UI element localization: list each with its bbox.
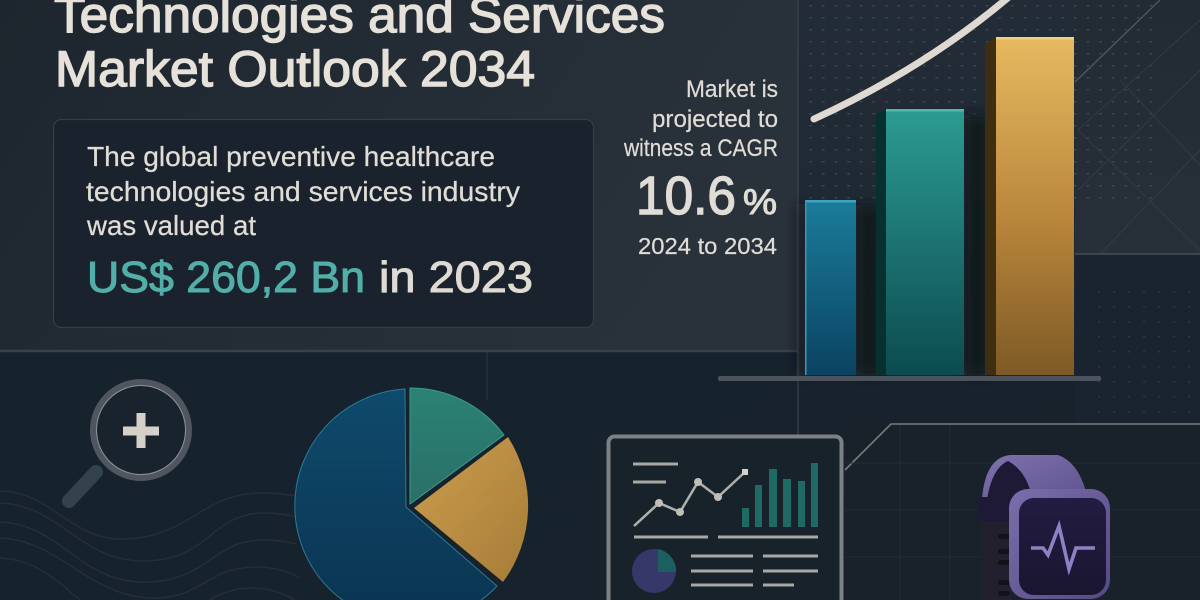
CAGR callout: 2024 to 2034: [638, 233, 777, 259]
watch strap: [982, 455, 1086, 500]
CAGR callout: Market is: [686, 76, 778, 103]
CAGR callout: 10.6: [636, 166, 736, 226]
growth arrow curve: [814, 0, 1010, 119]
dashboard text lines: [633, 464, 818, 585]
market value description: technologies and services industry: [86, 176, 520, 207]
title: [54, 0, 665, 97]
market value description: The global preventive healthcare: [87, 141, 495, 172]
market value description: was valued at: [86, 210, 256, 241]
market value figure: [87, 253, 533, 302]
dashboard pie chart: [632, 549, 676, 593]
slice: blue: [295, 389, 497, 600]
decorative wave lines: [0, 491, 300, 600]
icon: magnifier: [69, 382, 188, 501]
slice: teal: [410, 388, 504, 504]
watch case: [1009, 489, 1110, 599]
slice: gold: [414, 437, 528, 582]
dashboard line chart: [634, 469, 748, 526]
market value description: [86, 141, 520, 241]
bar: gold: [985, 37, 1074, 375]
bar: blue: [805, 200, 856, 375]
bar chart: [718, 0, 1101, 381]
market value figure: in 2023: [379, 253, 533, 302]
title: Market Outlook 2034: [55, 41, 535, 97]
CAGR callout: %: [743, 183, 777, 222]
bar: teal: [876, 109, 964, 375]
bar shadows: [796, 115, 991, 376]
watch screen: [1019, 498, 1106, 595]
icon: smartwatch: [977, 455, 1110, 600]
CAGR callout: projected to: [652, 106, 778, 133]
heartbeat pulse: [1031, 526, 1095, 569]
CAGR callout: witness a CAGR: [623, 135, 778, 162]
chart baseline: [718, 376, 1101, 381]
panel: market value: [54, 120, 594, 328]
CAGR callout: [623, 76, 778, 259]
watch strap holes: [998, 534, 1010, 596]
dashboard icon: [608, 436, 842, 600]
market value figure: US$ 260,2 Bn: [87, 253, 365, 302]
dashboard bar chart: [742, 463, 818, 527]
pie chart: [295, 388, 528, 600]
